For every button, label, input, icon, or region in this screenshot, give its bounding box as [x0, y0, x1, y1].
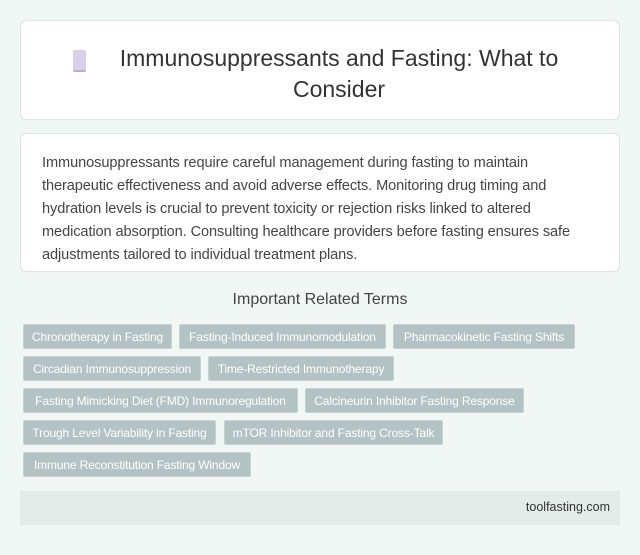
tag — [23, 324, 172, 349]
tag: Calcineurin Inhibitor Fasting Response — [314, 394, 515, 408]
tag — [23, 452, 251, 477]
tag: Circadian Immunosuppression — [33, 362, 191, 376]
tag — [393, 324, 575, 349]
description text — [42, 155, 570, 263]
footer text: toolfasting.com — [526, 500, 610, 514]
tag: Fasting Mimicking Diet (FMD) Immunoregulation — [35, 394, 286, 408]
tag: Time-Restricted Immunotherapy — [218, 362, 384, 376]
title — [120, 45, 558, 102]
tag: Fasting-Induced Immunomodulation — [189, 330, 376, 344]
tag: Pharmacokinetic Fasting Shifts — [404, 330, 564, 344]
tag — [179, 324, 386, 349]
title card — [20, 20, 620, 120]
description card — [20, 133, 620, 272]
description text: therapeutic effectiveness and avoid adverse effects. Monitoring drug timing and — [42, 178, 546, 194]
icon: document — [73, 50, 86, 72]
heading: related terms: Important Related Terms — [233, 291, 407, 308]
tag — [305, 388, 524, 413]
description text: adjustments tailored to individual treatment plans. — [42, 247, 357, 263]
title: Immunosuppressants and Fasting: What to — [120, 45, 558, 71]
tag — [23, 388, 298, 413]
description text: medication absorption. Consulting healthcare providers before fasting ensures safe — [42, 224, 570, 240]
description text: hydration levels is crucial to prevent toxicity or rejection risks linked to altered — [42, 201, 531, 217]
tag — [224, 420, 443, 445]
tag: Chronotherapy in Fasting — [32, 330, 163, 344]
description text: Immunosuppressants require careful management during fasting to maintain — [42, 155, 528, 171]
tag — [23, 356, 201, 381]
tag: mTOR Inhibitor and Fasting Cross-Talk — [233, 426, 434, 440]
tag — [208, 356, 394, 381]
tag — [23, 420, 216, 445]
tag: Trough Level Variability in Fasting — [32, 426, 207, 440]
footer — [20, 491, 620, 525]
tag: Immune Reconstitution Fasting Window — [34, 458, 240, 472]
title: Consider — [293, 76, 385, 102]
